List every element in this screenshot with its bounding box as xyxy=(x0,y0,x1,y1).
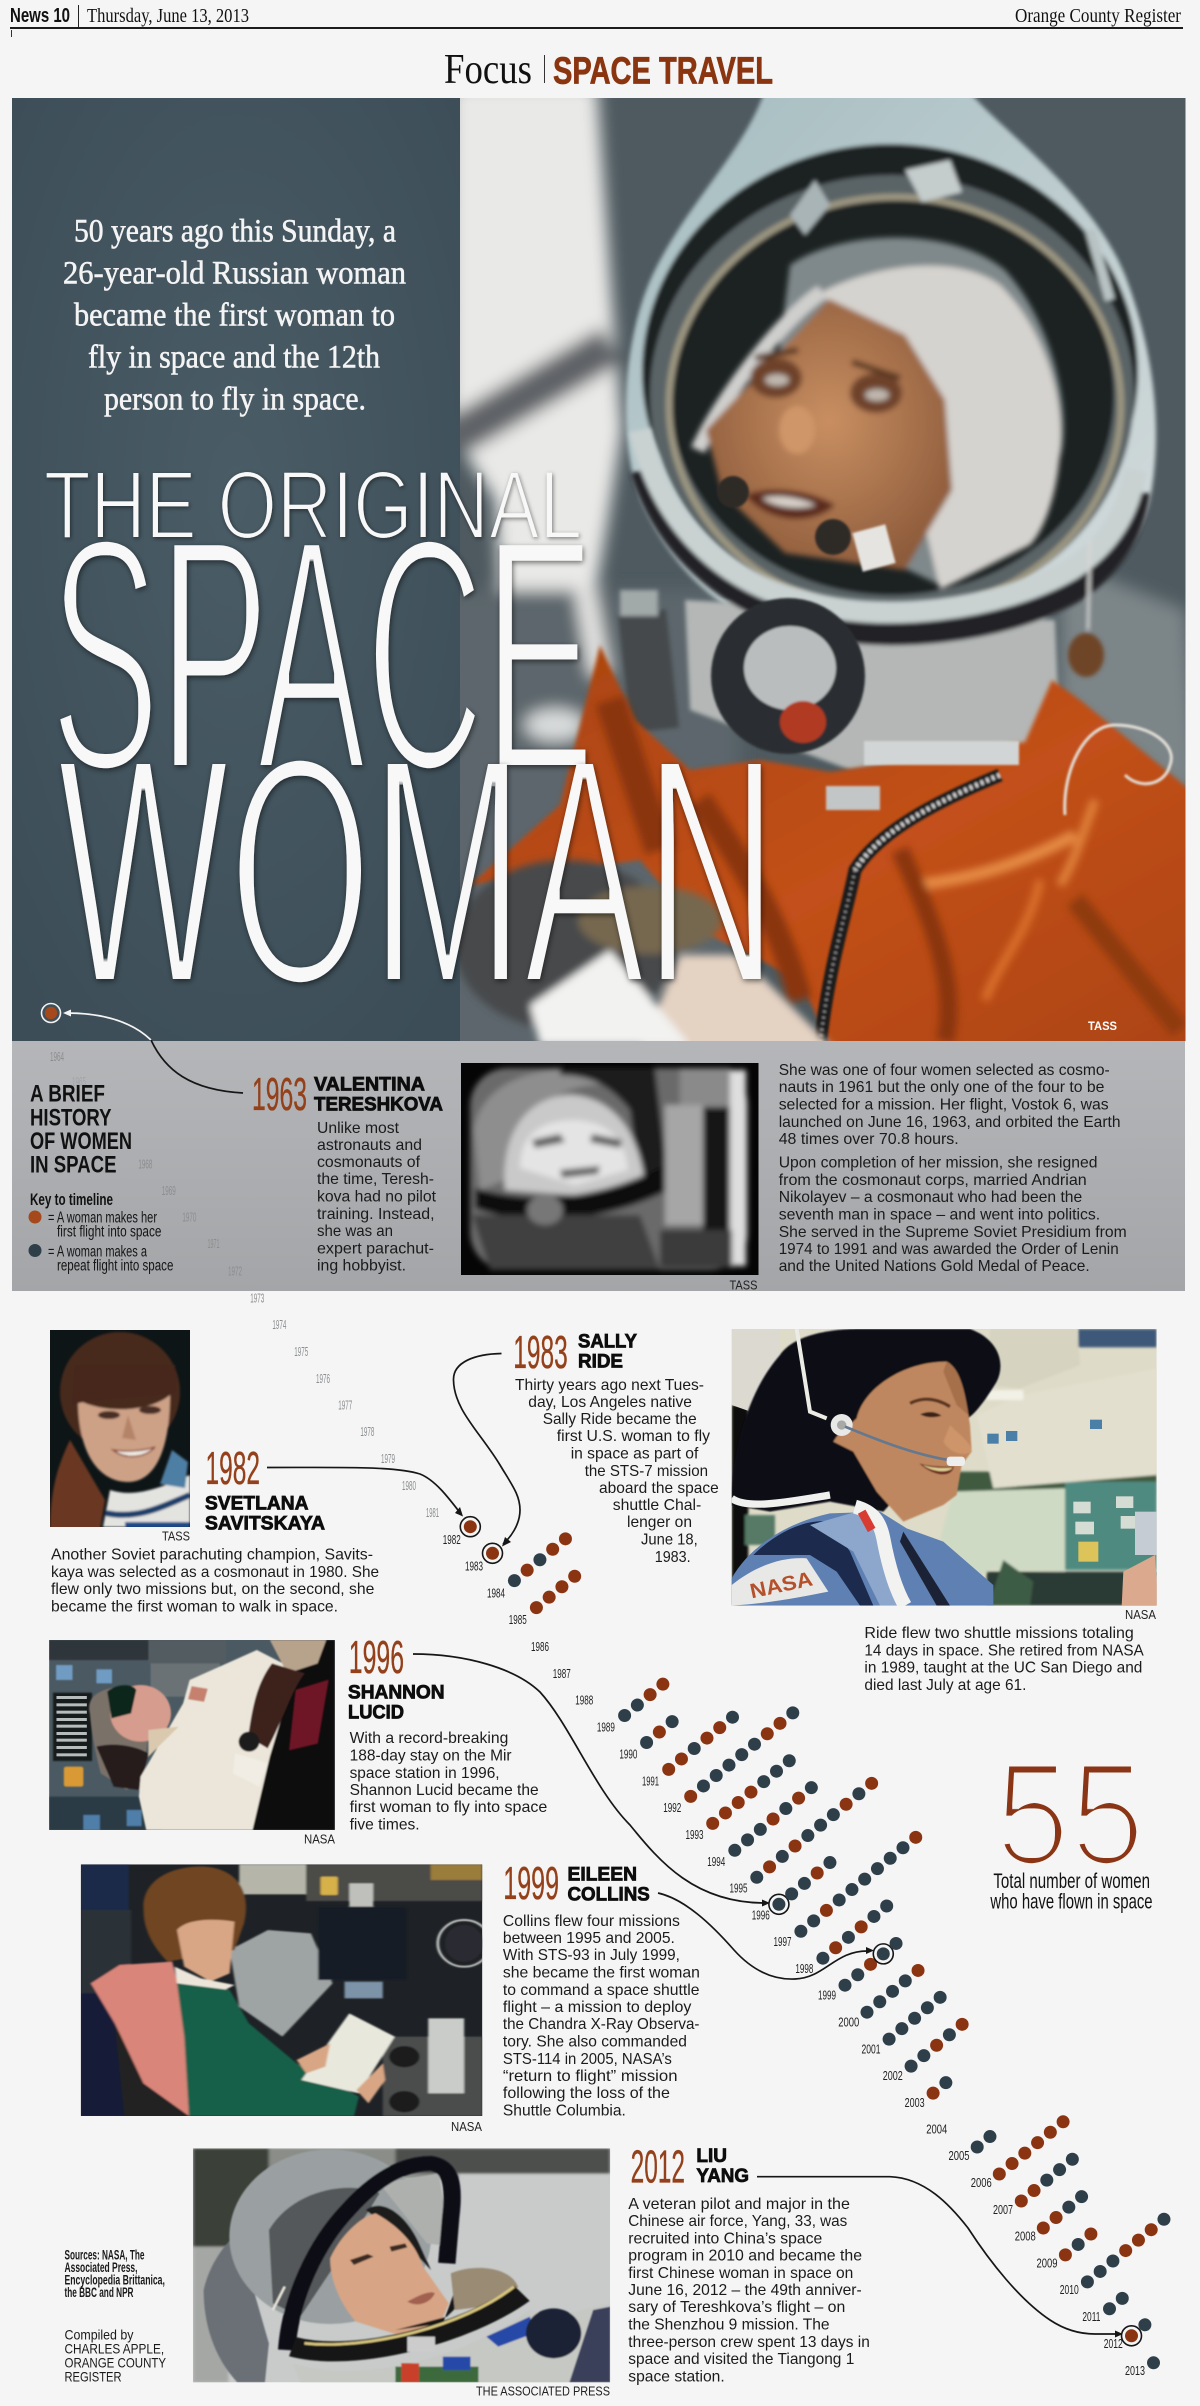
photo: Tereshkova TV still xyxy=(461,1063,759,1275)
profile: Eileen Collins: STS-114 in 2005, NASA’s xyxy=(503,2051,672,2068)
profile: Valentina Tereshkova: she was an xyxy=(317,1223,393,1240)
profile: Valentina Tereshkova: expert parachut- xyxy=(317,1240,434,1258)
timeline year labels: 1995 xyxy=(730,1880,748,1896)
profile: Eileen Collins xyxy=(503,1857,700,2120)
profile: Shannon Lucid: Shannon Lucid became the xyxy=(350,1782,539,1799)
timeline year labels: 1972 xyxy=(228,1264,242,1278)
profile: Svetlana Savitskaya: 1982 xyxy=(206,1442,260,1494)
photo: Svetlana Savitskaya xyxy=(50,1330,190,1530)
sources and credit: REGISTER xyxy=(64,2369,122,2385)
heading: a brief history: IN SPACE xyxy=(30,1152,116,1178)
heading: a brief history xyxy=(30,1082,132,1178)
timeline year labels: 1982 xyxy=(443,1532,461,1547)
profile: Svetlana Savitskaya: SAVITSKAYA xyxy=(205,1512,325,1534)
timeline year labels: 1994 xyxy=(707,1854,725,1869)
timeline year labels: 2009 xyxy=(1036,2256,1058,2270)
text block: Tereshkova biography: selected for a mission. Her flight, Vostok 6, was xyxy=(779,1096,1109,1114)
timeline year labels: 1977 xyxy=(338,1398,352,1412)
profile: Valentina Tereshkova: the time, Teresh- xyxy=(317,1171,434,1188)
profile: Valentina Tereshkova: astronauts and xyxy=(317,1137,422,1154)
timeline year labels: 1997 xyxy=(774,1934,792,1949)
profile: Shannon Lucid: SHANNON xyxy=(348,1681,445,1703)
intro text block: 50 years ago this Sunday, a xyxy=(74,214,396,250)
sources and credit: CHARLES APPLE, xyxy=(64,2340,164,2356)
profile: Liu Yang: first Chinese woman in space on xyxy=(628,2265,853,2282)
arrow: 1983 to timeline xyxy=(453,1354,520,1546)
timeline year labels: 2007 xyxy=(993,2202,1013,2217)
profile: Shannon Lucid: space station in 1996, xyxy=(350,1765,500,1782)
profile: Svetlana Savitskaya xyxy=(51,1442,379,1616)
dots: 1995 xyxy=(750,1777,878,1884)
timeline year labels: 1988 xyxy=(575,1692,593,1708)
text block: Tereshkova biography: Nikolayev – a cosmonaut who had been the xyxy=(779,1189,1082,1206)
heading: a brief history: A BRIEF xyxy=(30,1082,105,1108)
profile: Shannon Lucid: 188-day stay on the Mir xyxy=(350,1748,512,1764)
dots: 1990 xyxy=(640,1715,679,1749)
photo: Liu Yang xyxy=(193,2148,610,2382)
sources and credit xyxy=(64,2248,167,2385)
profile: Eileen Collins: the Chandra X-Ray Observa- xyxy=(503,2016,700,2033)
profile: Liu Yang: A veteran pilot and major in the xyxy=(628,2196,850,2213)
timeline year labels: 2003 xyxy=(905,2095,925,2110)
sources and credit: the BBC and NPR xyxy=(64,2285,134,2300)
big number callout: 55 women: 55 xyxy=(995,1732,1145,1896)
timeline year labels: 1991 xyxy=(642,1774,659,1788)
timeline year labels: 1978 xyxy=(360,1425,374,1439)
timeline year labels: 2011 xyxy=(1082,2309,1100,2324)
profile: Eileen Collins: 1999 xyxy=(503,1857,559,1909)
profile: Eileen Collins: tory. She also commanded xyxy=(503,2034,687,2050)
profile: Sally Ride: aboard the space xyxy=(599,1480,719,1497)
dots: 2013 xyxy=(1147,2356,1160,2369)
key to timeline legend: = A woman makes a xyxy=(48,1244,147,1260)
timeline year labels: 1993 xyxy=(686,1827,704,1842)
profile: Sally Ride: first U.S. woman to fly xyxy=(557,1428,710,1445)
dots: 2009 xyxy=(1059,2228,1097,2261)
timeline year labels: 1973 xyxy=(250,1292,264,1306)
oxygen dial with red button xyxy=(711,598,865,754)
photo credit: The Associated Press: THE ASSOCIATED PRESS xyxy=(476,2384,610,2398)
timeline year labels: 1992 xyxy=(663,1800,681,1815)
profile: Valentina Tereshkova: ing hobbyist. xyxy=(317,1258,406,1274)
timeline year labels: 1984 xyxy=(487,1586,505,1600)
dots: 2005 xyxy=(971,2130,996,2154)
profile: Svetlana Savitskaya: Another Soviet parachuting champion, Savits- xyxy=(51,1546,373,1564)
intro text block: 26-year-old Russian woman xyxy=(63,256,406,292)
text block: Tereshkova biography: nauts in 1961 but the only one of the four to be xyxy=(779,1079,1104,1096)
profile: Eileen Collins: between 1995 and 2005. xyxy=(503,1930,675,1947)
section flag: Focus / Space Travel xyxy=(444,47,773,93)
profile: Liu Yang: space and visited the Tiangong 1 xyxy=(628,2351,854,2368)
profile: Valentina Tereshkova: Unlike most xyxy=(317,1120,400,1137)
profile: Shannon Lucid: five times. xyxy=(350,1816,420,1834)
glove and hand xyxy=(455,860,835,1050)
timeline year labels: 1981 xyxy=(426,1506,439,1520)
suit zipper and clasps xyxy=(820,725,1171,1045)
key to timeline legend: repeat flight into space xyxy=(57,1258,173,1274)
timeline year labels: 2013 xyxy=(1125,2363,1145,2378)
intro text block xyxy=(63,214,406,418)
sources and credit: ORANGE COUNTY xyxy=(64,2354,167,2370)
profile: Eileen Collins: she became the first woman xyxy=(503,1964,700,1982)
timeline dots by year xyxy=(460,1517,1170,2369)
profile: Liu Yang: the Shenzhou 9 mission. The xyxy=(628,2316,830,2334)
timeline year labels: 2012 xyxy=(1104,2336,1123,2351)
timeline year labels: 1979 xyxy=(381,1452,395,1466)
profile: Eileen Collins: following the loss of the xyxy=(503,2085,670,2102)
section flag: Focus / Space Travel: SPACE TRAVEL xyxy=(553,50,773,92)
text block: Tereshkova biography xyxy=(779,1062,1127,1275)
intro text block: person to fly in space. xyxy=(104,382,366,418)
timeline year labels: 1999 xyxy=(818,1988,836,2002)
timeline year labels: 2005 xyxy=(948,2148,970,2163)
profile: Sally Ride: the STS-7 mission xyxy=(585,1463,708,1480)
dots: 1998 xyxy=(816,1900,893,1965)
dots: 2007 xyxy=(1015,2153,1079,2208)
timeline year labels: 1989 xyxy=(597,1720,615,1734)
timeline year labels: 1986 xyxy=(531,1639,549,1654)
profile: Valentina Tereshkova: 1963 xyxy=(252,1068,307,1120)
key to timeline legend: Key to timeline xyxy=(30,1190,113,1209)
sources and credit: Associated Press, xyxy=(64,2260,138,2275)
profile: Sally Ride: Sally Ride became the xyxy=(543,1411,697,1428)
text block: Ride biography: 14 days in space. She retired from NASA xyxy=(864,1642,1144,1660)
arrow: 1999 to timeline xyxy=(658,1893,874,1979)
profile: Svetlana Savitskaya: flew only two missions but, on the second, she xyxy=(51,1581,374,1598)
photo credit: NASA: NASA xyxy=(451,2120,483,2134)
timeline year labels: 1970 xyxy=(182,1210,196,1224)
timeline year labels: 1975 xyxy=(294,1345,308,1359)
timeline year labels: 1974 xyxy=(272,1318,286,1332)
profile: Liu Yang: Chinese air force, Yang, 33, was xyxy=(628,2213,847,2230)
text block: Ride biography: died last July at age 61. xyxy=(864,1677,1026,1694)
profile: Liu Yang: three-person crew spent 13 days in xyxy=(628,2334,870,2351)
key to timeline legend: = A woman makes her xyxy=(48,1210,157,1226)
timeline year labels: 1969 xyxy=(162,1184,176,1198)
dots: 2000 xyxy=(860,1964,925,2019)
profile: Liu Yang xyxy=(628,2141,870,2386)
profile: Liu Yang: YANG xyxy=(696,2165,749,2187)
timeline year labels: 2002 xyxy=(883,2068,903,2083)
sources and credit: Sources: NASA, The xyxy=(64,2248,145,2262)
profile: Eileen Collins: With STS-93 in July 1999, xyxy=(503,1947,680,1964)
heading: a brief history: OF WOMEN xyxy=(30,1129,132,1155)
photo credit: NASA: NASA xyxy=(1125,1608,1157,1622)
main headline: The Original Space Woman: SPACE xyxy=(50,468,594,841)
dots: 1992 xyxy=(684,1706,799,1803)
photo credit: TASS: TASS xyxy=(162,1530,190,1544)
arrow: 1996 to timeline xyxy=(413,1654,770,1906)
dots: 2012 with highlight xyxy=(1122,2318,1151,2346)
profile: Shannon Lucid: first woman to fly into space xyxy=(350,1799,547,1816)
profile: Sally Ride: in space as part of xyxy=(571,1446,699,1462)
panel: hero left slate panel xyxy=(12,98,460,1041)
profile: Liu Yang: June 16, 2012 – the 49th anniver- xyxy=(628,2282,862,2299)
profile: Sally Ride: 1983. xyxy=(655,1549,691,1566)
heading: a brief history: HISTORY xyxy=(30,1106,112,1132)
newspaper header strip: Orange County Register xyxy=(1015,6,1181,27)
profile: Liu Yang: sary of Tereshkova’s flight – on xyxy=(628,2299,845,2316)
profile: Shannon Lucid: LUCID xyxy=(348,1701,404,1723)
profile: Shannon Lucid xyxy=(348,1631,547,1834)
profile: Liu Yang: LIU xyxy=(696,2145,727,2167)
timeline year labels: 2010 xyxy=(1060,2282,1079,2297)
timeline year labels: 2000 xyxy=(838,2014,859,2030)
timeline year labels: 1987 xyxy=(553,1666,571,1681)
timeline marker 1963 with arrow xyxy=(42,1004,243,1093)
profile: Shannon Lucid: With a record-breaking xyxy=(350,1730,508,1747)
newspaper header strip xyxy=(10,5,1183,37)
hero photo: cosmonaut in helmet and orange suit xyxy=(440,85,1200,1060)
photo: Sally Ride xyxy=(732,1329,1158,1607)
dot: 1982 highlighted xyxy=(460,1517,480,1537)
text block: Tereshkova biography: launched on June 16, 1963, and orbited the Earth xyxy=(779,1114,1120,1131)
photo: Shannon Lucid xyxy=(49,1640,335,1830)
profile: Eileen Collins: COLLINS xyxy=(568,1884,650,1906)
text block: Ride biography: Ride flew two shuttle missions totaling xyxy=(864,1625,1134,1642)
dots: 2006 xyxy=(993,2115,1070,2180)
neck, hose and suit collar xyxy=(620,430,1138,770)
profile: Eileen Collins: EILEEN xyxy=(568,1864,637,1886)
timeline year labels: 2008 xyxy=(1015,2228,1036,2244)
arrow: 1982 to timeline xyxy=(267,1467,463,1516)
dots: 2010 xyxy=(1081,2213,1170,2288)
text block: Ride biography: in 1989, taught at the UC San Diego and xyxy=(864,1660,1142,1676)
profile: Sally Ride: shuttle Chal- xyxy=(613,1497,701,1514)
profile: Liu Yang: space station. xyxy=(628,2368,725,2386)
panel: gray history panel xyxy=(12,1041,1185,1291)
profile: Svetlana Savitskaya: SVETLANA xyxy=(205,1492,308,1514)
timeline year labels: 2006 xyxy=(971,2175,992,2190)
helmet microphones xyxy=(717,476,896,572)
timeline year labels: 1976 xyxy=(316,1372,330,1386)
timeline year labels: 2004 xyxy=(926,2122,947,2136)
photo: Sally Ride: NASA xyxy=(748,1568,815,1603)
arrow: 2012 to timeline xyxy=(757,2177,1123,2338)
profile: Valentina Tereshkova: cosmonauts of xyxy=(317,1154,421,1171)
dots: 1999 with highlight xyxy=(838,1937,903,1992)
timeline year labels: 1968 xyxy=(138,1158,152,1172)
timeline year labels xyxy=(50,1050,1145,2378)
profile: Sally Ride: June 18, xyxy=(641,1532,698,1548)
text block: Ride biography xyxy=(864,1625,1144,1694)
orange pressure suit xyxy=(470,645,1190,1045)
timeline year labels: 1985 xyxy=(509,1612,527,1627)
helmet shell xyxy=(626,90,1156,650)
profile: Eileen Collins: Shuttle Columbia. xyxy=(503,2102,626,2120)
profile: Liu Yang: program in 2010 and became the xyxy=(628,2248,862,2264)
profile: Valentina Tereshkova: training. Instead, xyxy=(317,1206,434,1223)
timeline year labels: 1983 xyxy=(465,1558,483,1574)
timeline year labels: 2001 xyxy=(862,2042,880,2056)
profile: Svetlana Savitskaya: kaya was selected as a cosmonaut in 1980. She xyxy=(51,1564,379,1581)
timeline year labels: 1990 xyxy=(619,1746,637,1762)
profile: Eileen Collins: flight – a mission to deploy xyxy=(503,1999,691,2016)
key to timeline legend xyxy=(28,1190,173,1274)
profile: Liu Yang: 2012 xyxy=(631,2141,685,2193)
timeline year labels: 1998 xyxy=(795,1961,813,1976)
profile: Sally Ride xyxy=(513,1326,719,1566)
text block: Tereshkova biography: She served in the Supreme Soviet Presidium from xyxy=(779,1224,1127,1241)
text block: Tereshkova biography: from the cosmonaut corps, married Andrian xyxy=(779,1172,1087,1189)
text block: Tereshkova biography: Upon completion of her mission, she resigned xyxy=(779,1154,1098,1172)
newspaper header strip: Thursday, June 13, 2013 xyxy=(87,6,249,27)
dots: 2002 xyxy=(905,2018,969,2073)
intro text block: became the first woman to xyxy=(74,298,395,334)
intro text block: fly in space and the 12th xyxy=(88,340,380,376)
profile: Valentina Tereshkova: VALENTINA xyxy=(314,1074,425,1096)
key to timeline legend: first flight into space xyxy=(57,1224,162,1240)
dots: 1997 xyxy=(794,1831,922,1938)
profile: Svetlana Savitskaya: became the first woman to walk in space. xyxy=(51,1598,338,1616)
profile: Sally Ride: 1983 xyxy=(513,1326,568,1378)
photo credit: NASA: NASA xyxy=(304,1832,336,1846)
text block: Tereshkova biography: 48 times over 70.8 hours. xyxy=(779,1131,959,1148)
dots: 1985 xyxy=(530,1570,581,1614)
photo credit: TASS: TASS xyxy=(730,1278,758,1292)
photo: Eileen Collins xyxy=(81,1864,490,2116)
profile: Shannon Lucid: 1996 xyxy=(349,1631,404,1683)
dots: 2011 xyxy=(1103,2292,1129,2315)
dots: 1994 xyxy=(728,1781,818,1857)
dots: 1989 xyxy=(618,1678,669,1722)
text block: Tereshkova biography: 1974 to 1991 and was awarded the Order of Lenin xyxy=(779,1241,1119,1258)
profile: Sally Ride: Thirty years ago next Tues- xyxy=(515,1377,704,1394)
timeline year labels: 1996 xyxy=(752,1908,770,1922)
profile: Valentina Tereshkova: TERESHKOVA xyxy=(314,1094,443,1116)
text block: Tereshkova biography: seventh man in space – and went into politics. xyxy=(779,1206,1100,1224)
profile: Valentina Tereshkova xyxy=(252,1068,443,1274)
dots: 1984 xyxy=(508,1532,572,1587)
profile: Eileen Collins: Collins flew four missions xyxy=(503,1913,680,1930)
profile: Liu Yang: recruited into China’s space xyxy=(628,2230,822,2248)
dots: 1996 with highlight xyxy=(769,1856,836,1914)
text block: Tereshkova biography: and the United Nations Gold Medal of Peace. xyxy=(779,1258,1090,1275)
profile: Sally Ride: lenger on xyxy=(627,1514,692,1531)
sources and credit: Encyclopedia Brittanica, xyxy=(64,2272,165,2288)
profile: Valentina Tereshkova: kova had no pilot xyxy=(317,1188,437,1206)
dot: 1983 highlighted xyxy=(482,1543,502,1563)
newspaper header strip: News 10 xyxy=(10,5,70,27)
text block: Tereshkova biography: She was one of four women selected as cosmo- xyxy=(779,1062,1110,1079)
timeline year labels: 1965 xyxy=(72,1075,86,1089)
profile: Eileen Collins: to command a space shuttle xyxy=(503,1982,700,1999)
dots: 1993 xyxy=(706,1754,796,1830)
timeline year labels: 1980 xyxy=(402,1479,416,1493)
timeline year labels: 1964 xyxy=(50,1050,64,1064)
section flag: Focus / Space Travel: Focus xyxy=(444,47,532,93)
profile: Sally Ride: RIDE xyxy=(578,1351,623,1373)
profile: Sally Ride: day, Los Angeles native xyxy=(528,1394,692,1411)
main headline: The Original Space Woman xyxy=(44,450,777,1054)
main headline: The Original Space Woman: THE ORIGINAL xyxy=(44,450,582,560)
dots: 2001 xyxy=(883,1991,947,2046)
helmet interior, hood and face xyxy=(698,238,1064,590)
dots: 2008 xyxy=(1037,2190,1088,2234)
timeline year labels: 1971 xyxy=(208,1237,220,1251)
profile: Sally Ride: SALLY xyxy=(578,1330,637,1352)
dots: 1991 xyxy=(662,1711,739,1776)
sources and credit: Compiled by xyxy=(64,2326,134,2342)
dots: 2003 xyxy=(927,2076,952,2100)
profile: Eileen Collins: “return to flight” mission xyxy=(503,2068,678,2085)
photo credit: TASS xyxy=(1088,1021,1117,1033)
